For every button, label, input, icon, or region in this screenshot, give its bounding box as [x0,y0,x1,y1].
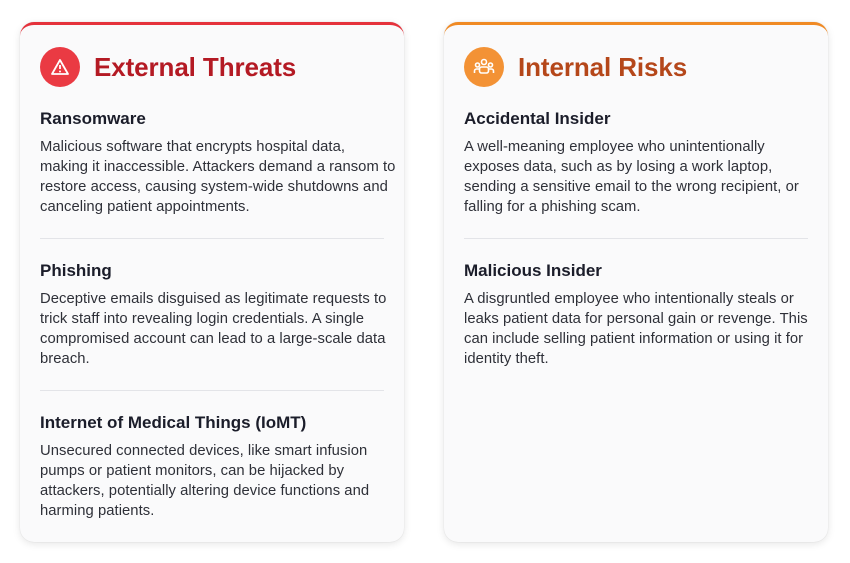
text: ransomware: restore access, causing system-wide shutdowns and [40,179,388,195]
text: phishing: compromised account can lead to a large-scale data [40,331,386,347]
text: malicious insider: identity theft. [464,351,549,367]
text: ransomware [40,139,395,215]
text: phishing: trick staff into revealing login credentials. A single [40,311,364,327]
heading: malicious insider: Malicious Insider [464,261,602,280]
icon: warning [40,47,80,87]
text: iomt [40,443,369,519]
text: ransomware: canceling patient appointments. [40,199,250,215]
icon: people [464,47,504,87]
text: malicious insider: can include selling patient information or using it for [464,331,803,347]
text: iomt: harming patients. [40,503,154,519]
heading: phishing: Phishing [40,261,112,280]
title: External Threats [94,52,296,82]
text: ransomware: making it inaccessible. Attackers demand a ransom to [40,159,395,175]
text: accidental insider: exposes data, such as by losing a work laptop, [464,159,772,175]
text: phishing [40,291,386,367]
panel: internal risks [444,22,828,542]
text: malicious insider: A disgruntled employee who intentionally steals or [464,291,794,307]
text: accidental insider: falling for a phishing scam. [464,199,641,215]
text: phishing: breach. [40,351,90,367]
text: malicious insider: leaks patient data for personal gain or revenge. This [464,311,808,327]
text: accidental insider [464,139,799,215]
text: malicious insider [464,291,808,367]
text: ransomware: Malicious software that encrypts hospital data, [40,139,345,155]
text: accidental insider: sending a sensitive email to the wrong recipient, or [464,179,799,195]
heading: iomt: Internet of Medical Things (IoMT) [40,413,306,432]
panel: external threats [20,22,404,542]
title: Internal Risks [518,52,687,82]
text: iomt: attackers, potentially altering device functions and [40,483,369,499]
text: accidental insider: A well-meaning employee who unintentionally [464,139,765,155]
text: phishing: Deceptive emails disguised as legitimate requests to [40,291,386,307]
heading: ransomware: Ransomware [40,109,146,128]
text: iomt: Unsecured connected devices, like smart infusion [40,443,367,459]
text: iomt: pumps or patient monitors, can be hijacked by [40,463,344,479]
heading: accidental insider: Accidental Insider [464,109,610,128]
